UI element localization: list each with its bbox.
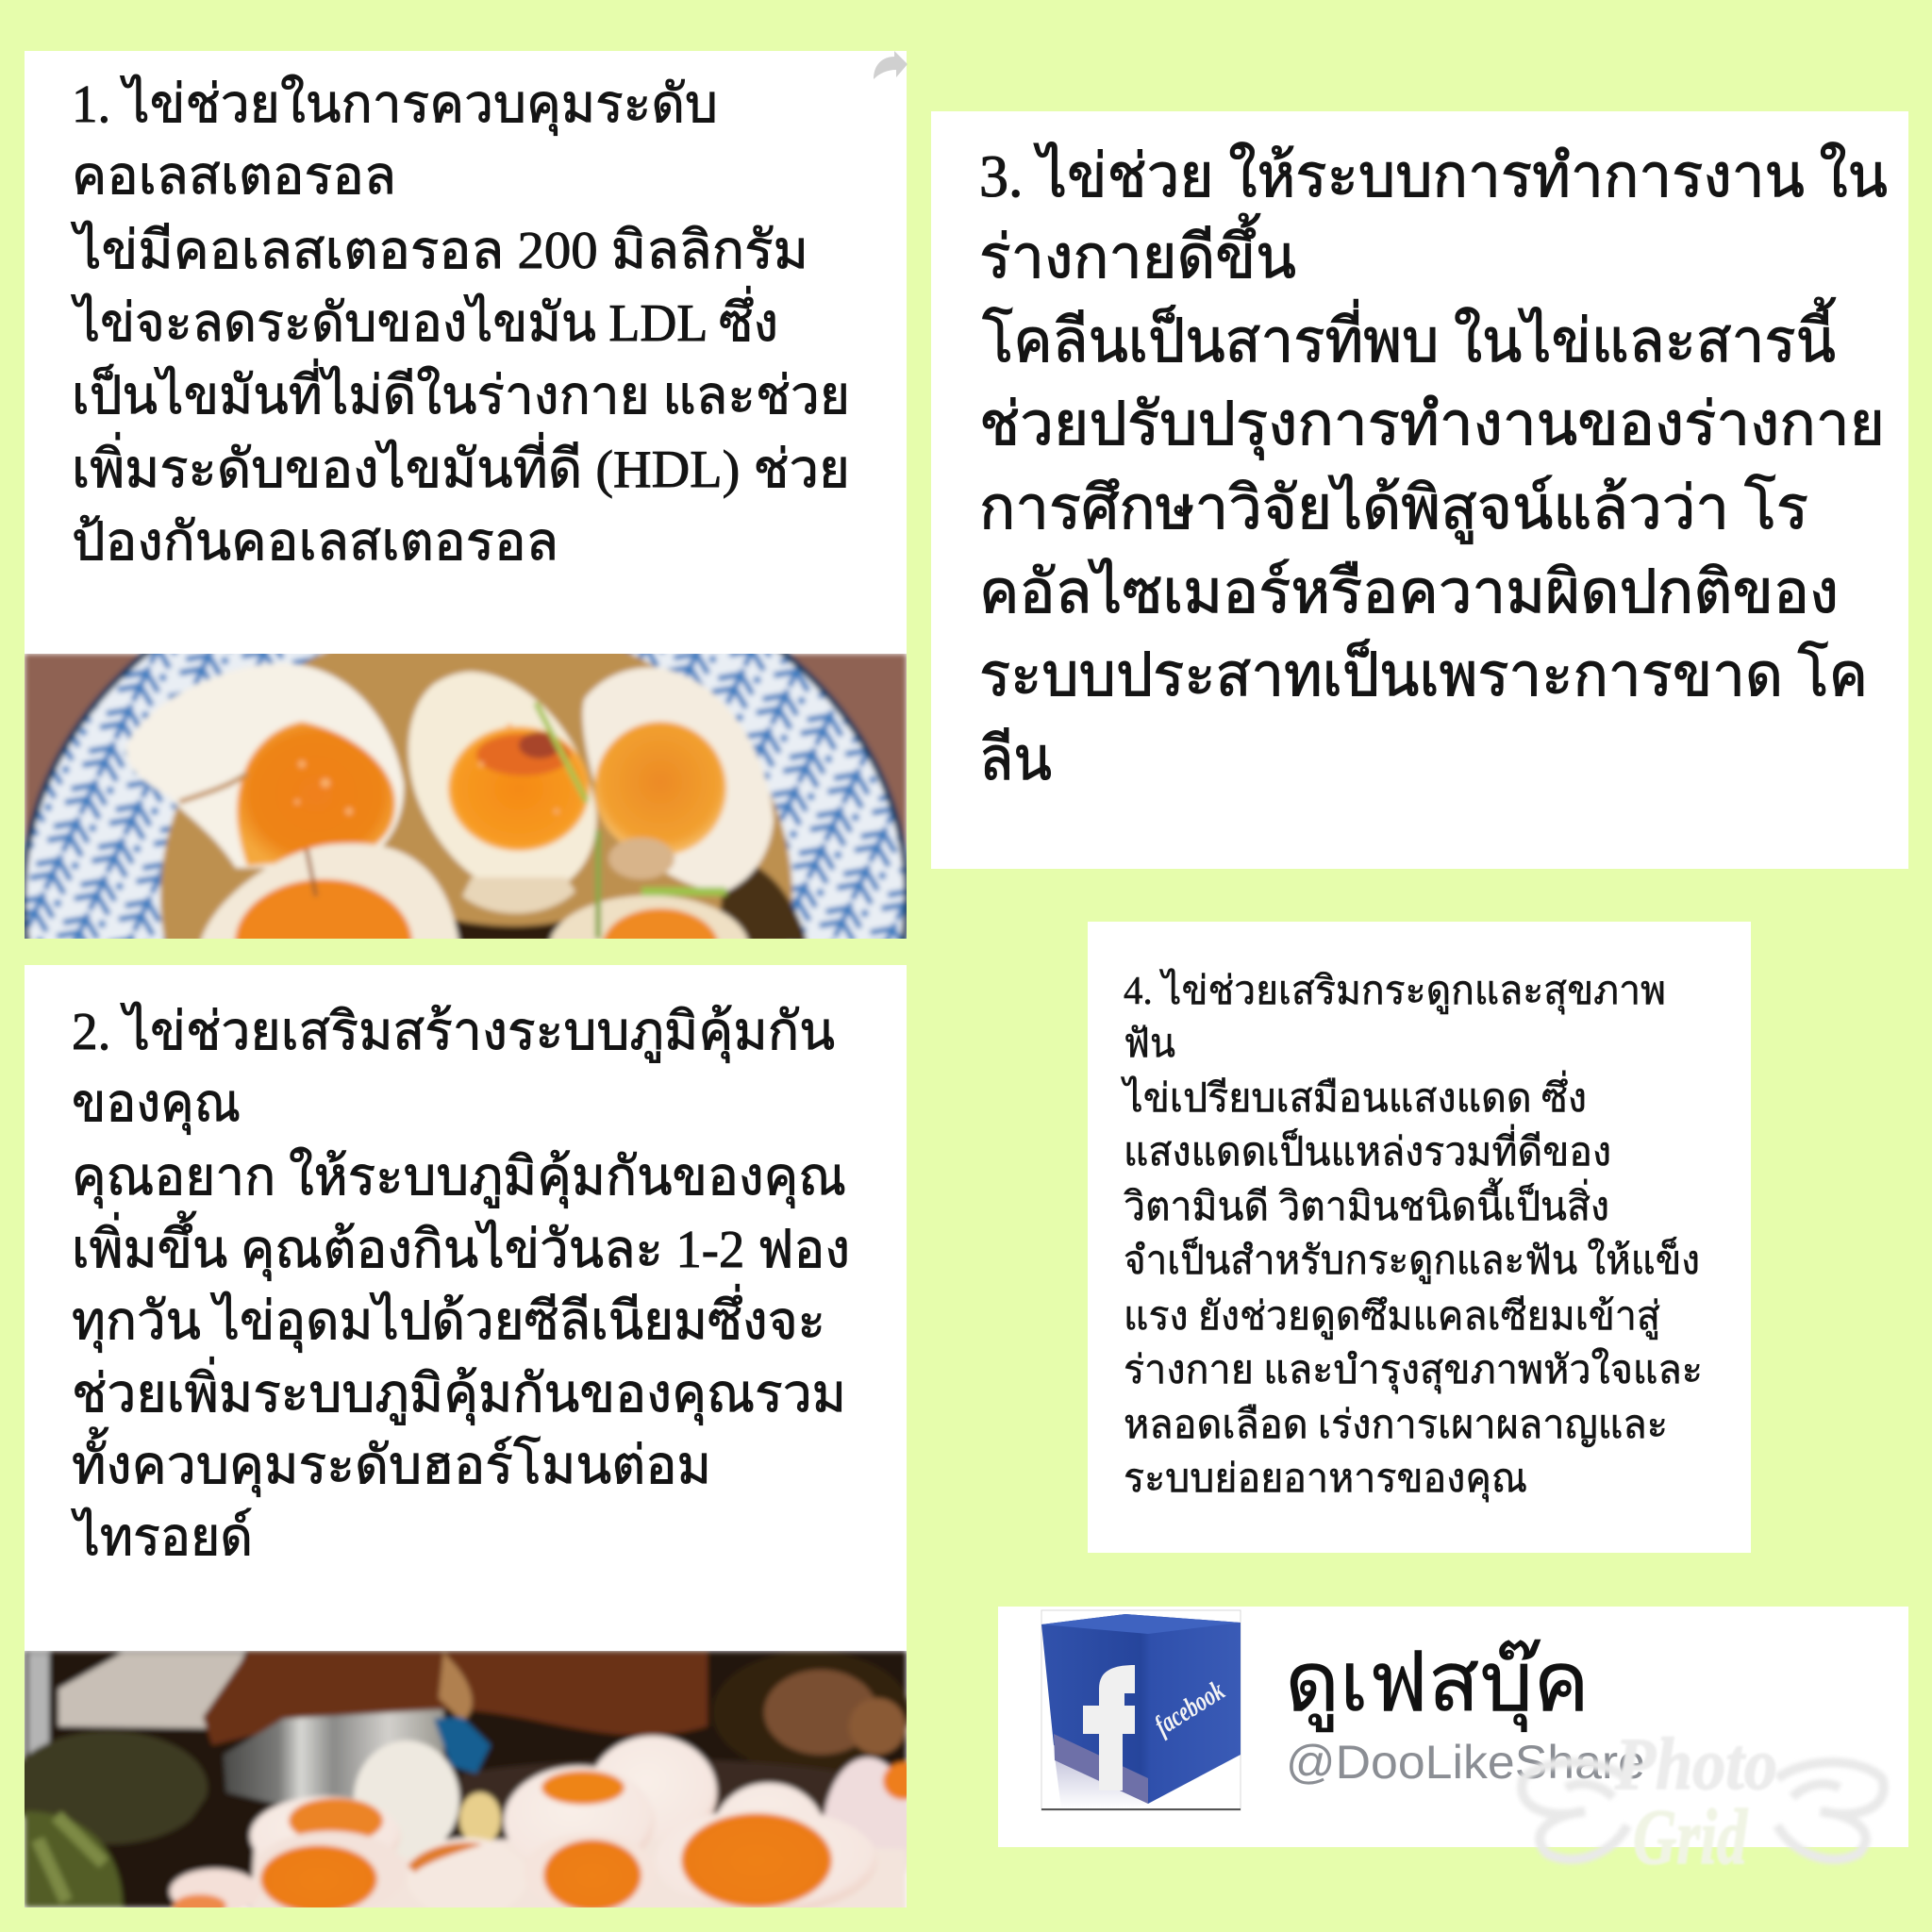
text: body systems heading and body: ช่วยปรับปรุงการทำงานของร่างกาย bbox=[979, 391, 1885, 460]
middle eggs bbox=[449, 1832, 492, 1849]
text: immunity heading and body: ทุกวัน ไข่อุดมไปด้วยซีลีเนียมซึ่งจะ bbox=[72, 1284, 825, 1353]
text: body systems heading and body: โคลีนเป็นสารที่พบ ในไข่และสารนี้ bbox=[982, 297, 1837, 375]
white egg bbox=[354, 1740, 459, 1857]
text: immunity heading and body: 2. ไข่ช่วยเสริมสร้างระบบภูมิคุ้มกัน bbox=[72, 1001, 835, 1063]
egg 3 bbox=[583, 667, 774, 891]
text: bones heading and body: แสงแดดเป็นแหล่งรวมที่ดีของ bbox=[1124, 1124, 1611, 1174]
image: braised eggs in blue plate bbox=[25, 654, 907, 939]
text: bones heading and body bbox=[1121, 968, 1703, 1503]
watermark: Photo Grid: Grid bbox=[1633, 1793, 1749, 1881]
text: immunity heading and body: ช่วยเพิ่มระบบภูมิคุ้มกันของคุณรวม bbox=[72, 1357, 846, 1425]
text: body systems heading and body: การศึกษาวิจัยได้พิสูจน์แล้วว่า โร bbox=[979, 474, 1808, 544]
text: cholesterol heading and body: ไข่จะลดระดับของไขมัน LDL ซึ่ง bbox=[71, 286, 778, 353]
text: bones heading and body: หลอดเลือด เร่งการเผาผลาญและ bbox=[1124, 1404, 1668, 1447]
base of pale eggs bbox=[250, 1840, 907, 1915]
text: cholesterol heading and body: 1. ไข่ช่วยในการควบคุมระดับ bbox=[72, 74, 718, 136]
back eggs bbox=[589, 1736, 717, 1849]
text: cholesterol heading and body bbox=[71, 74, 850, 572]
egg 2 bbox=[408, 672, 596, 896]
egg 1 bbox=[125, 663, 404, 868]
text: cholesterol heading and body: ไข่มีคอเลสเตอรอล 200 มิลลิกรัม bbox=[71, 220, 808, 280]
text: bones heading and body: แรง ยังช่วยดูดซึมแคลเซียมเข้าสู่ bbox=[1124, 1295, 1660, 1340]
text: bones heading and body: ฟัน bbox=[1124, 1023, 1175, 1066]
text: cholesterol heading and body: คอเลสเตอรอล bbox=[72, 147, 396, 206]
text: body systems heading and body bbox=[979, 142, 1888, 792]
panel: facebook page bbox=[998, 1607, 1908, 1847]
panel: body systems bbox=[931, 111, 1908, 869]
text: cholesterol heading and body: ป้องกันคอเลสเตอรอล bbox=[72, 513, 558, 572]
text: immunity heading and body: คุณอยาก ให้ระบบภูมิคุ้มกันของคุณ bbox=[72, 1146, 846, 1208]
text: body systems heading and body: ร่างกายดีขึ้น bbox=[979, 213, 1296, 291]
text: body systems heading and body: 3. ไข่ช่วย ให้ระบบการทำการงาน ใน bbox=[979, 142, 1888, 209]
watermark: Photo Grid bbox=[1522, 1723, 1884, 1881]
text: bones heading and body: ระบบย่อยอาหารของคุณ bbox=[1124, 1457, 1527, 1503]
panel: cholesterol bbox=[25, 51, 908, 939]
text: bones heading and body: วิตามินดี วิตามินชนิดนี้เป็นสิ่ง bbox=[1124, 1177, 1609, 1229]
text: body systems heading and body: คอัลไซเมอร์หรือความผิดปกติของ bbox=[979, 558, 1839, 625]
panel: immune system bbox=[9, 965, 924, 1917]
text: bones heading and body: ร่างกาย และบำรุงสุขภาพหัวใจและ bbox=[1124, 1347, 1703, 1394]
yolk speckles bbox=[294, 724, 559, 815]
text: immunity heading and body: ไทรอยด์ bbox=[71, 1507, 253, 1567]
text: bones heading and body: 4. ไข่ช่วยเสริมกระดูกและสุขภาพ bbox=[1124, 968, 1666, 1015]
text: facebook handle: @DooLikeShare bbox=[1286, 1736, 1645, 1789]
panel: bones and teeth bbox=[1088, 922, 1751, 1553]
icon: facebook cube bbox=[1041, 1610, 1241, 1810]
icon: facebook cube: facebook bbox=[1149, 1674, 1230, 1741]
text: facebook title: ดูเฟสบุ๊ค bbox=[1285, 1635, 1590, 1732]
icon: share arrow bbox=[874, 51, 908, 79]
text: immunity heading and body: ของคุณ bbox=[72, 1074, 241, 1135]
egg 4 bbox=[200, 843, 459, 943]
egg 5 bbox=[543, 891, 753, 939]
image: soft boiled eggs with side dishes bbox=[9, 1651, 924, 1917]
text: immunity heading and body bbox=[71, 1001, 850, 1567]
text: body systems heading and body: ลีน bbox=[979, 725, 1052, 792]
text: cholesterol heading and body: เป็นไขมันที่ไม่ดีในร่างกาย และช่วย bbox=[72, 358, 850, 425]
text: bones heading and body: จำเป็นสำหรับกระดูกและฟัน ให้แข็ง bbox=[1124, 1237, 1700, 1284]
text: immunity heading and body: เพิ่มขึ้น คุณต้องกินไข่วันละ 1-2 ฟอง bbox=[72, 1211, 850, 1281]
text: bones heading and body: ไข่เปรียบเสมือนแสงแดด ซึ่ง bbox=[1121, 1071, 1587, 1121]
text: body systems heading and body: ระบบประสาทเป็นเพราะการขาด โค bbox=[979, 640, 1868, 708]
text: immunity heading and body: ทั้งควบคุมระดับฮอร์โมนต่อม bbox=[72, 1427, 711, 1497]
watermark: Photo Grid: Photo bbox=[1614, 1723, 1777, 1805]
text: cholesterol heading and body: เพิ่มระดับของไขมันที่ดี (HDL) ช่วย bbox=[72, 432, 850, 499]
